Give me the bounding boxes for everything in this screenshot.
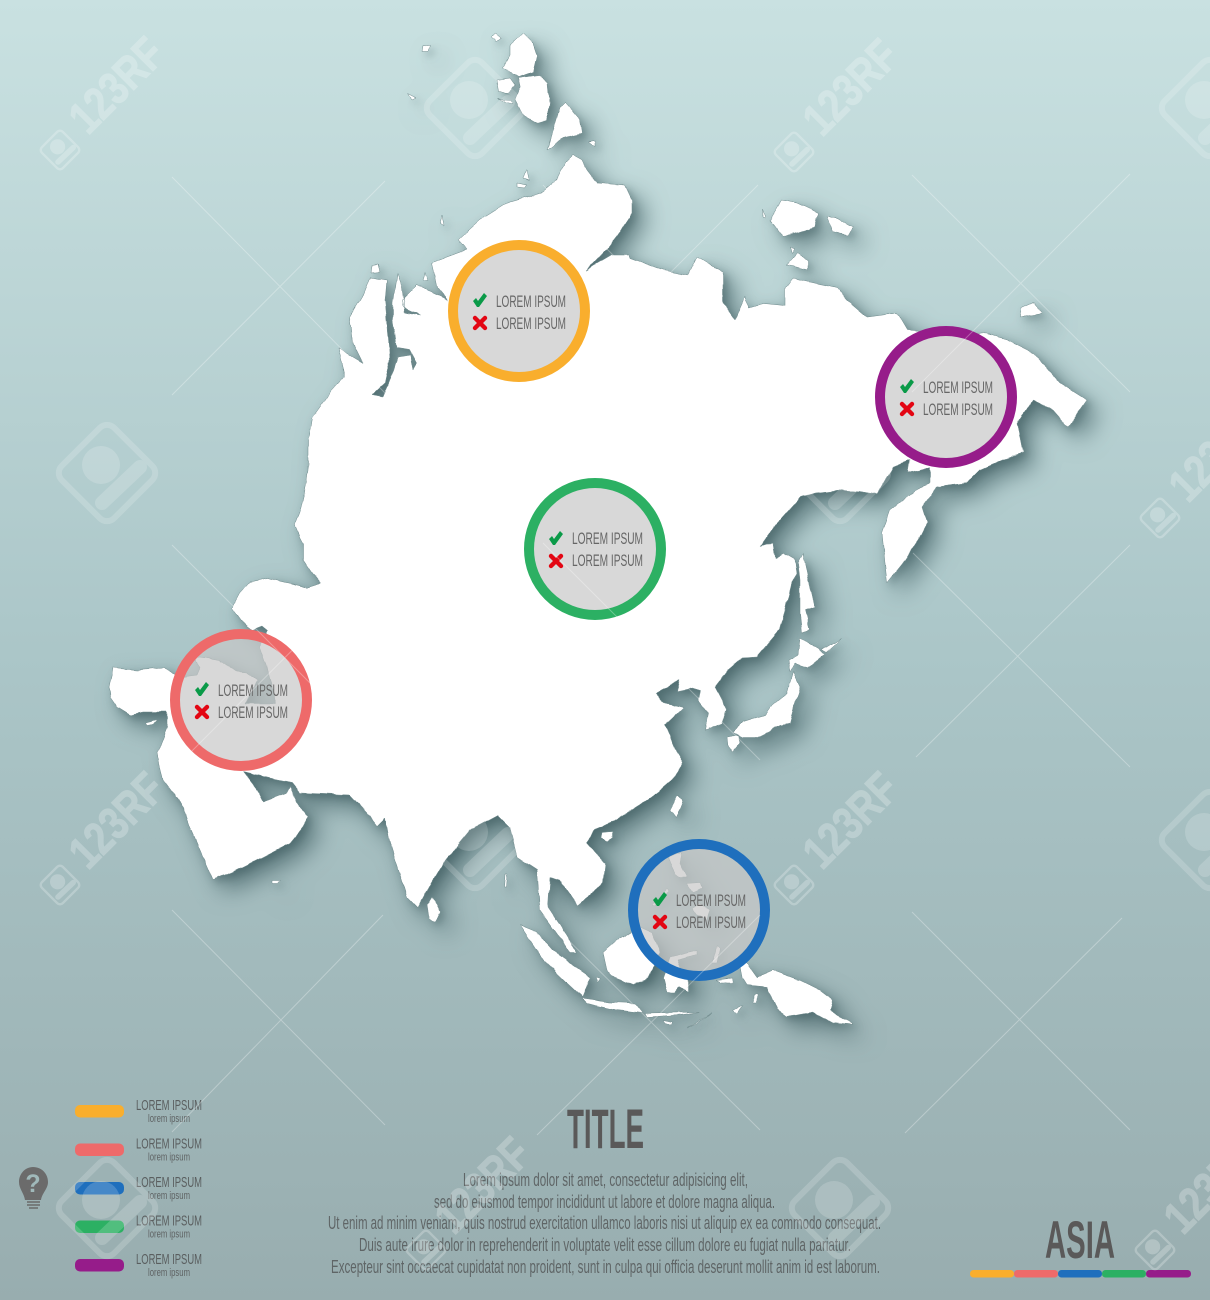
colour strip: [970, 1270, 1191, 1278]
labels: [923, 379, 993, 419]
labels: LOREM IPSUM: [923, 401, 993, 419]
labels: LOREM IPSUM: [676, 892, 746, 910]
icon: check: [900, 379, 914, 393]
labels: [496, 293, 566, 333]
legend row: purple: LOREM IPSUM: [136, 1251, 202, 1268]
legend row: orange: [75, 1097, 202, 1125]
icon: light bulb with question mark: ?: [25, 1170, 41, 1198]
text: TITLE: [567, 1097, 644, 1160]
legend row: orange: lorem ipsum: [148, 1113, 190, 1125]
icon: cross: [197, 707, 207, 717]
labels: [218, 682, 288, 722]
southern islands: [145, 720, 853, 1028]
labels: LOREM IPSUM: [676, 914, 746, 932]
icon: light bulb with question mark: [19, 1167, 48, 1208]
arctic islands: [371, 33, 1042, 317]
text block: sed do eiusmod tempor incididunt ut labore et dolore magna aliqua.: [434, 1191, 775, 1212]
legend: [75, 1097, 202, 1279]
watermark overlay: 123RF: [792, 762, 908, 878]
legend row: red: lorem ipsum: [148, 1152, 190, 1164]
legend row: blue: lorem ipsum: [148, 1190, 190, 1202]
labels: [676, 892, 746, 932]
watermark overlay: 123RF: [792, 29, 908, 145]
icon: cross: [655, 917, 665, 927]
continent name: ASIA: [1045, 1211, 1115, 1270]
labels: LOREM IPSUM: [923, 379, 993, 397]
legend row: green: [75, 1212, 202, 1240]
labels: LOREM IPSUM: [572, 552, 643, 570]
labels: LOREM IPSUM: [218, 704, 288, 722]
icon: check: [549, 531, 563, 545]
circle: green: [529, 483, 661, 615]
watermark overlay: 123RF: [58, 762, 174, 878]
watermark overlay: 123RF: [424, 395, 540, 511]
labels: LOREM IPSUM: [218, 682, 288, 700]
circle: red: [175, 634, 307, 766]
watermark overlay: 123RF: [424, 1127, 540, 1243]
legend row: purple: lorem ipsum: [148, 1267, 190, 1279]
text block: Excepteur sint occaecat cupidatat non proident, sunt in culpa qui officia deserunt mollit anim id est laborum.: [331, 1256, 880, 1277]
legend row: blue: [75, 1174, 202, 1202]
icon: check: [473, 293, 487, 307]
text block: [328, 1169, 881, 1277]
circle: purple: [880, 331, 1012, 463]
labels: LOREM IPSUM: [572, 530, 643, 548]
legend row: green: lorem ipsum: [148, 1228, 190, 1240]
text block: Ut enim ad minim veniam, quis nostrud exercitation ullamco laboris nisi ut aliquip ex ea commodo consequat.: [328, 1212, 881, 1233]
legend row: orange: LOREM IPSUM: [136, 1097, 202, 1114]
map of Asia: [109, 33, 1087, 1028]
labels: LOREM IPSUM: [496, 293, 566, 311]
text block: Lorem ipsum dolor sit amet, consectetur adipisicing elit,: [463, 1169, 748, 1190]
legend row: purple: [75, 1251, 202, 1279]
legend row: red: LOREM IPSUM: [136, 1136, 202, 1152]
circle: blue: [633, 844, 765, 976]
labels: LOREM IPSUM: [496, 315, 566, 333]
icon: cross: [551, 556, 561, 566]
icon: cross: [902, 404, 912, 414]
legend row: green: LOREM IPSUM: [136, 1212, 202, 1230]
japan and sakhalin: [727, 553, 842, 753]
circle: orange: [453, 245, 585, 377]
mainland: [109, 155, 1087, 953]
labels: [572, 530, 643, 570]
icon: check: [653, 892, 667, 906]
watermark overlay: 123RF: [58, 27, 174, 143]
legend row: red: [75, 1136, 202, 1164]
icon: check: [195, 682, 209, 696]
text block: Duis aute irure dolor in reprehenderit in voluptate velit esse cillum dolore eu fugiat nulla pariatur.: [359, 1234, 851, 1255]
legend row: blue: LOREM IPSUM: [136, 1174, 202, 1191]
icon: cross: [475, 318, 485, 328]
